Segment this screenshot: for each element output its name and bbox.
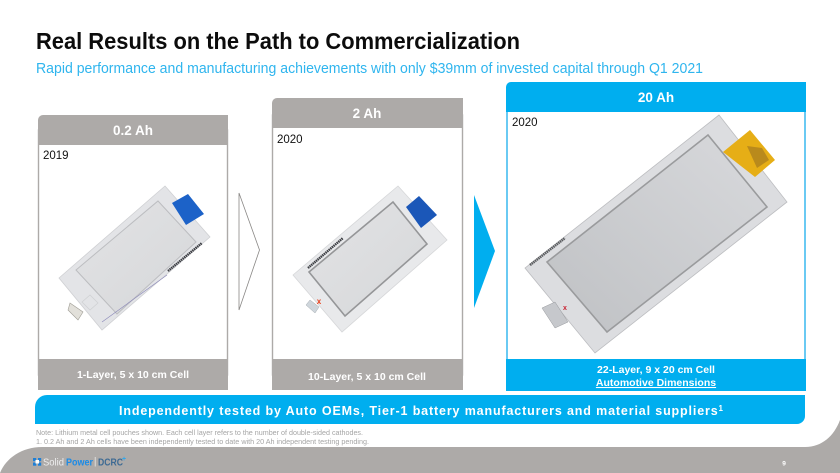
panel header bbox=[506, 82, 806, 112]
title: Real Results on the Path to Commercialization bbox=[36, 28, 520, 54]
cell photo: 10-layer pouch: x bbox=[317, 297, 322, 306]
footer logos: DCRC bbox=[98, 458, 123, 468]
footer bar bbox=[0, 420, 840, 473]
callout band bbox=[35, 395, 805, 424]
panel heading: 2 Ah bbox=[353, 106, 381, 121]
panel footer bbox=[506, 359, 806, 391]
callout band: 1 bbox=[719, 404, 724, 413]
footnotes: Note: Lithium metal cell pouches shown. Each cell layer refers to the number of double-sided cathodes. bbox=[36, 428, 363, 437]
footer logos: Solid bbox=[43, 458, 64, 468]
footer caption: 10-Layer, 5 x 10 cm Cell bbox=[308, 371, 426, 383]
panel header bbox=[38, 115, 228, 145]
footnotes: 1. 0.2 Ah and 2 Ah cells have been independently tested to date with 20 Ah independent testing pending. bbox=[36, 437, 369, 446]
footer caption: 22-Layer, 9 x 20 cm Cell bbox=[597, 364, 715, 376]
panel footer bbox=[272, 359, 463, 390]
footer caption: 1-Layer, 5 x 10 cm Cell bbox=[77, 369, 189, 381]
year label: 2019 bbox=[43, 150, 69, 162]
callout band: Independently tested by Auto OEMs, Tier-1 battery manufacturers and material suppliers bbox=[119, 404, 718, 418]
page number: 9 bbox=[782, 460, 786, 468]
panel header bbox=[272, 98, 463, 128]
panel footer bbox=[38, 359, 228, 390]
cell photo: 10-layer pouch bbox=[293, 186, 447, 332]
cell photo: 22-layer pouch bbox=[525, 115, 787, 353]
panel: 2 Ah cell bbox=[272, 98, 463, 390]
icon: Solid Power mark bbox=[33, 458, 41, 466]
year label: 2020 bbox=[277, 134, 303, 146]
arrow: solid blue bbox=[474, 195, 495, 308]
arrow: outline chevron bbox=[239, 193, 260, 310]
panel heading: 20 Ah bbox=[638, 90, 674, 105]
panel: 20 Ah cell bbox=[506, 82, 806, 391]
panel frame bbox=[272, 115, 462, 375]
panel frame bbox=[507, 100, 805, 370]
panel frame bbox=[38, 130, 228, 375]
year label: 2020 bbox=[512, 117, 538, 129]
subtitle: Rapid performance and manufacturing achievements with only $39mm of invested capital through Q1 2021 bbox=[36, 61, 703, 77]
footer caption: Automotive Dimensions bbox=[596, 377, 716, 389]
footer logos: Power bbox=[66, 458, 93, 468]
footer caption bbox=[596, 364, 716, 389]
footer logos: + bbox=[122, 456, 126, 463]
panel heading: 0.2 Ah bbox=[113, 123, 153, 138]
footer logos bbox=[33, 456, 126, 468]
footnotes bbox=[36, 428, 369, 446]
panel: 0.2 Ah cell bbox=[38, 115, 228, 390]
cell photo: 1-layer pouch bbox=[59, 186, 210, 330]
cell photo: 22-layer pouch: x bbox=[563, 305, 567, 312]
